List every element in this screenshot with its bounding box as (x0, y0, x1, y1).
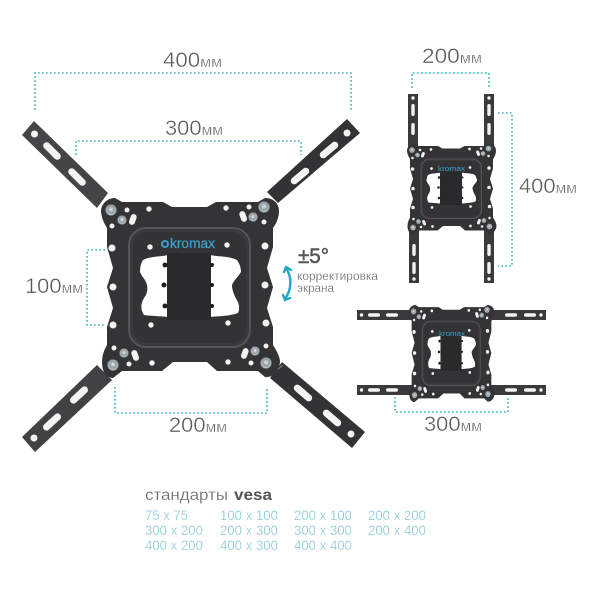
small mount: horizontal: kromax (439, 331, 466, 338)
VESA sizes table: 300 x 200 (145, 522, 203, 538)
VESA sizes table: 300 x 300 (294, 522, 352, 538)
label: 200 small: 200мм (422, 45, 482, 68)
icon: tilt arrow (283, 267, 291, 300)
VESA sizes table: 400 x 300 (220, 537, 278, 553)
logo: kromax main: kromax (170, 235, 215, 251)
arm: main top-right (267, 119, 360, 203)
VESA sizes table: 75 x 75 (145, 507, 188, 523)
VESA sizes table: 200 x 300 (220, 522, 278, 538)
logo mark (162, 241, 168, 247)
dimension: 300 small (395, 397, 508, 412)
dimension: 200 small (412, 73, 489, 88)
label: 400 small: 400мм (519, 175, 577, 198)
heading: VESA standards: vesa (234, 487, 272, 504)
dimension: 400 top (35, 73, 351, 110)
label: 200 main: 200мм (169, 414, 227, 437)
VESA sizes table (145, 507, 426, 553)
dimension: 100 main (87, 250, 105, 325)
tilt label: ±5° (298, 245, 329, 268)
dimension: 200 main (115, 387, 267, 413)
main mounting plate (101, 198, 280, 378)
small mount: vertical: kromax (438, 166, 466, 173)
label: 100 main: 100мм (25, 275, 83, 298)
VESA sizes table: 200 x 100 (294, 507, 352, 523)
arm: main bottom-left (22, 365, 112, 452)
VESA sizes table: 400 x 400 (294, 537, 352, 553)
VESA sizes table: 400 x 200 (145, 537, 203, 553)
dimension: 400 small (498, 113, 512, 266)
arm: main bottom-right (270, 362, 365, 448)
VESA sizes table: 100 x 100 (220, 507, 278, 523)
arm: main top-left (22, 121, 108, 208)
heading: VESA standards: стандарты (145, 487, 228, 504)
label: 300 small: 300мм (424, 413, 482, 436)
heading: VESA standards (145, 487, 272, 504)
label: 400 top: 400мм (163, 49, 222, 72)
VESA sizes table: 200 x 400 (368, 522, 426, 538)
tilt caption: экрана (297, 281, 334, 295)
tilt caption: корректировка (297, 269, 378, 283)
VESA sizes table: 200 x 200 (368, 507, 426, 523)
dimension: 300 main (76, 141, 301, 155)
small mount: vertical (407, 94, 496, 283)
label: 300 main: 300мм (165, 117, 223, 140)
small mount: horizontal (357, 305, 546, 402)
